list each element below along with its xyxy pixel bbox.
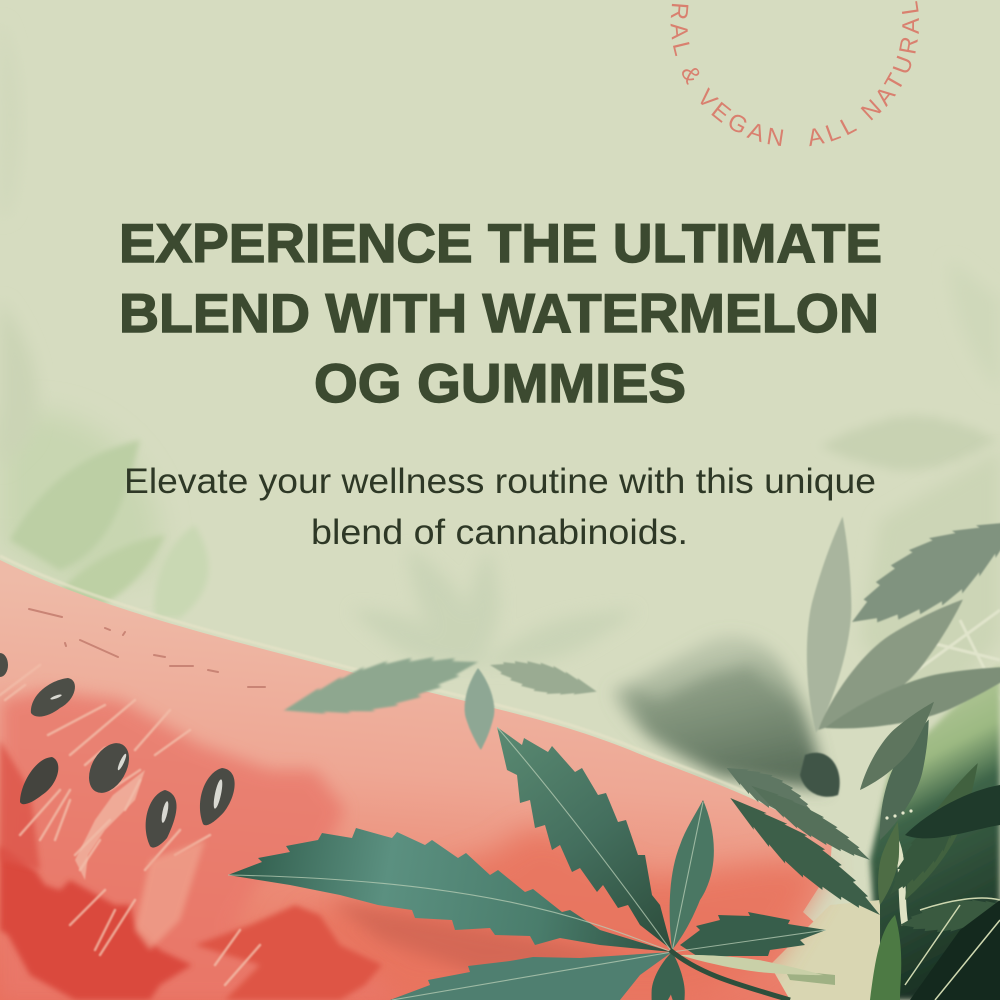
dark plant stalk with leaves bbox=[719, 693, 1000, 1000]
seed highlights bbox=[50, 694, 224, 823]
rind dashes bbox=[29, 609, 265, 687]
misty dark foliage bbox=[612, 636, 825, 790]
faded leaves upper right bbox=[795, 494, 1000, 748]
subtitle bbox=[124, 462, 876, 552]
mid red flesh bbox=[0, 690, 400, 1000]
leaflet: small upper bbox=[670, 800, 714, 950]
title: EXPERIENCE THE ULTIMATE bbox=[119, 212, 882, 274]
rind edge bbox=[0, 556, 832, 838]
title: OG GUMMIES bbox=[314, 352, 686, 414]
circular badge text bbox=[670, 1, 919, 146]
subtitle: blend of cannabinoids. bbox=[311, 513, 688, 552]
leaf shadow bbox=[330, 900, 640, 975]
cream patch below leaf bbox=[770, 900, 880, 1000]
watermelon seeds bbox=[0, 653, 235, 848]
green and dark foliage backdrop lower right bbox=[870, 665, 1000, 1000]
faded background foliage left bbox=[0, 20, 209, 618]
foreground cannabis leaf bbox=[228, 727, 826, 1000]
pale flesh strokes bbox=[0, 665, 260, 985]
leaf veins and stem bbox=[228, 727, 826, 1000]
title bbox=[119, 212, 882, 414]
subtitle: Elevate your wellness routine with this unique bbox=[124, 462, 876, 501]
pale patch bbox=[75, 770, 145, 880]
dark red flesh left bbox=[0, 845, 192, 1000]
coral bloom under leaves bbox=[300, 829, 830, 1000]
faded background foliage right bbox=[819, 260, 1000, 720]
leaflet: upper bbox=[497, 727, 672, 950]
leaflet: right bbox=[680, 912, 826, 958]
dark red flesh centre bbox=[195, 905, 382, 1000]
leaflet: left long bbox=[228, 828, 672, 952]
watermelon slice bbox=[0, 556, 900, 1000]
faded cannabis leaf in middle bbox=[278, 536, 644, 750]
leaflet: lower left bbox=[390, 952, 672, 1000]
title: BLEND WITH WATERMELON bbox=[119, 282, 879, 344]
leaflets: lower small bbox=[644, 949, 682, 1000]
leaflet: pale lower right bbox=[679, 949, 824, 981]
